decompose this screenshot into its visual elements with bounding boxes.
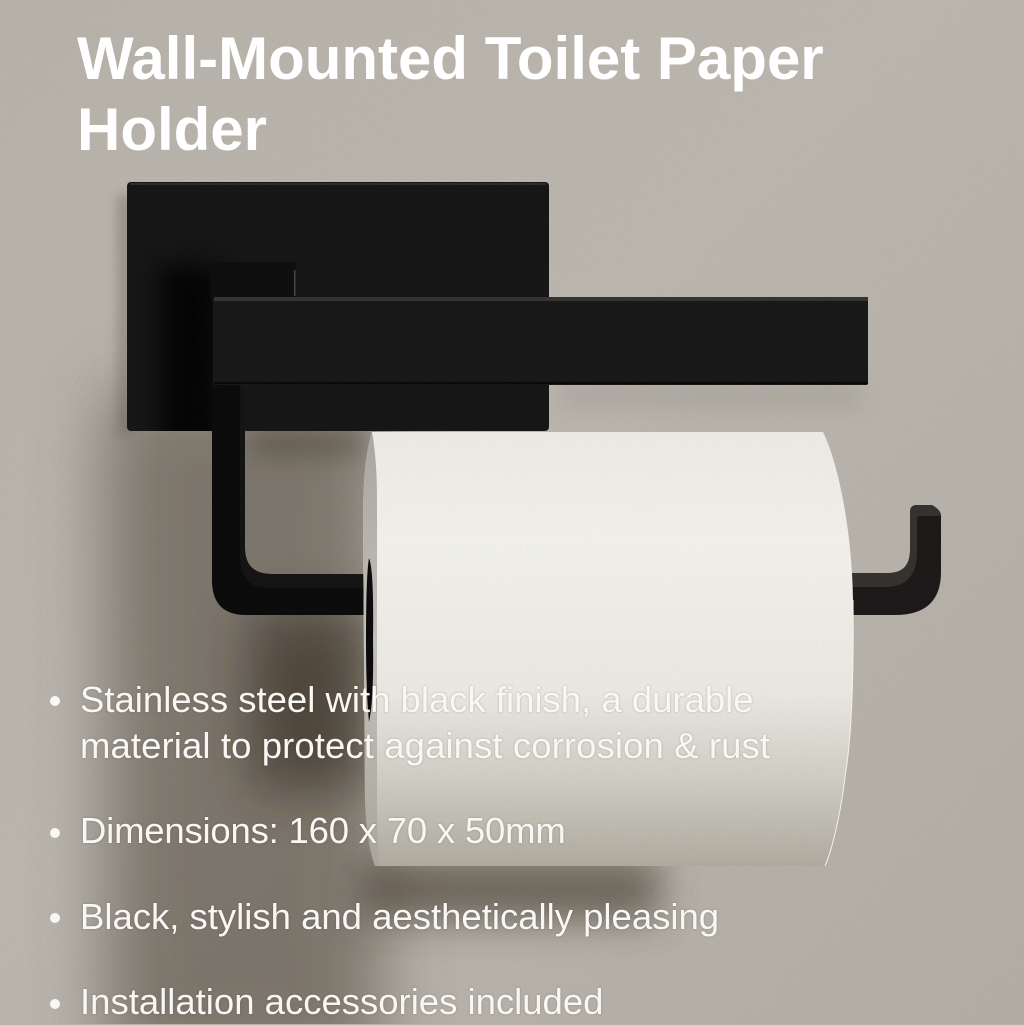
icon: paper roll — [363, 432, 853, 866]
title: Wall-Mounted Toilet Paper — [77, 25, 824, 92]
bullet list — [50, 679, 770, 1022]
bullet: dimensions: Dimensions: 160 x 70 x 50mm — [80, 810, 566, 851]
bullet: material: material to protect against corrosion & rust — [80, 725, 770, 766]
title — [77, 25, 824, 163]
icon: wall plate — [127, 182, 549, 455]
bullet: accessories: Installation accessories included — [80, 981, 603, 1022]
bullet: material: Stainless steel with black finish, a durable — [80, 679, 754, 720]
title: Holder — [77, 96, 267, 163]
wall shadows — [105, 195, 860, 1025]
product photo: holder and paper roll on wall — [64, 182, 1024, 1024]
bullet: style: Black, stylish and aesthetically pleasing — [80, 896, 719, 937]
bullet: material — [50, 679, 770, 766]
icon: holder arm and rod — [211, 262, 941, 615]
